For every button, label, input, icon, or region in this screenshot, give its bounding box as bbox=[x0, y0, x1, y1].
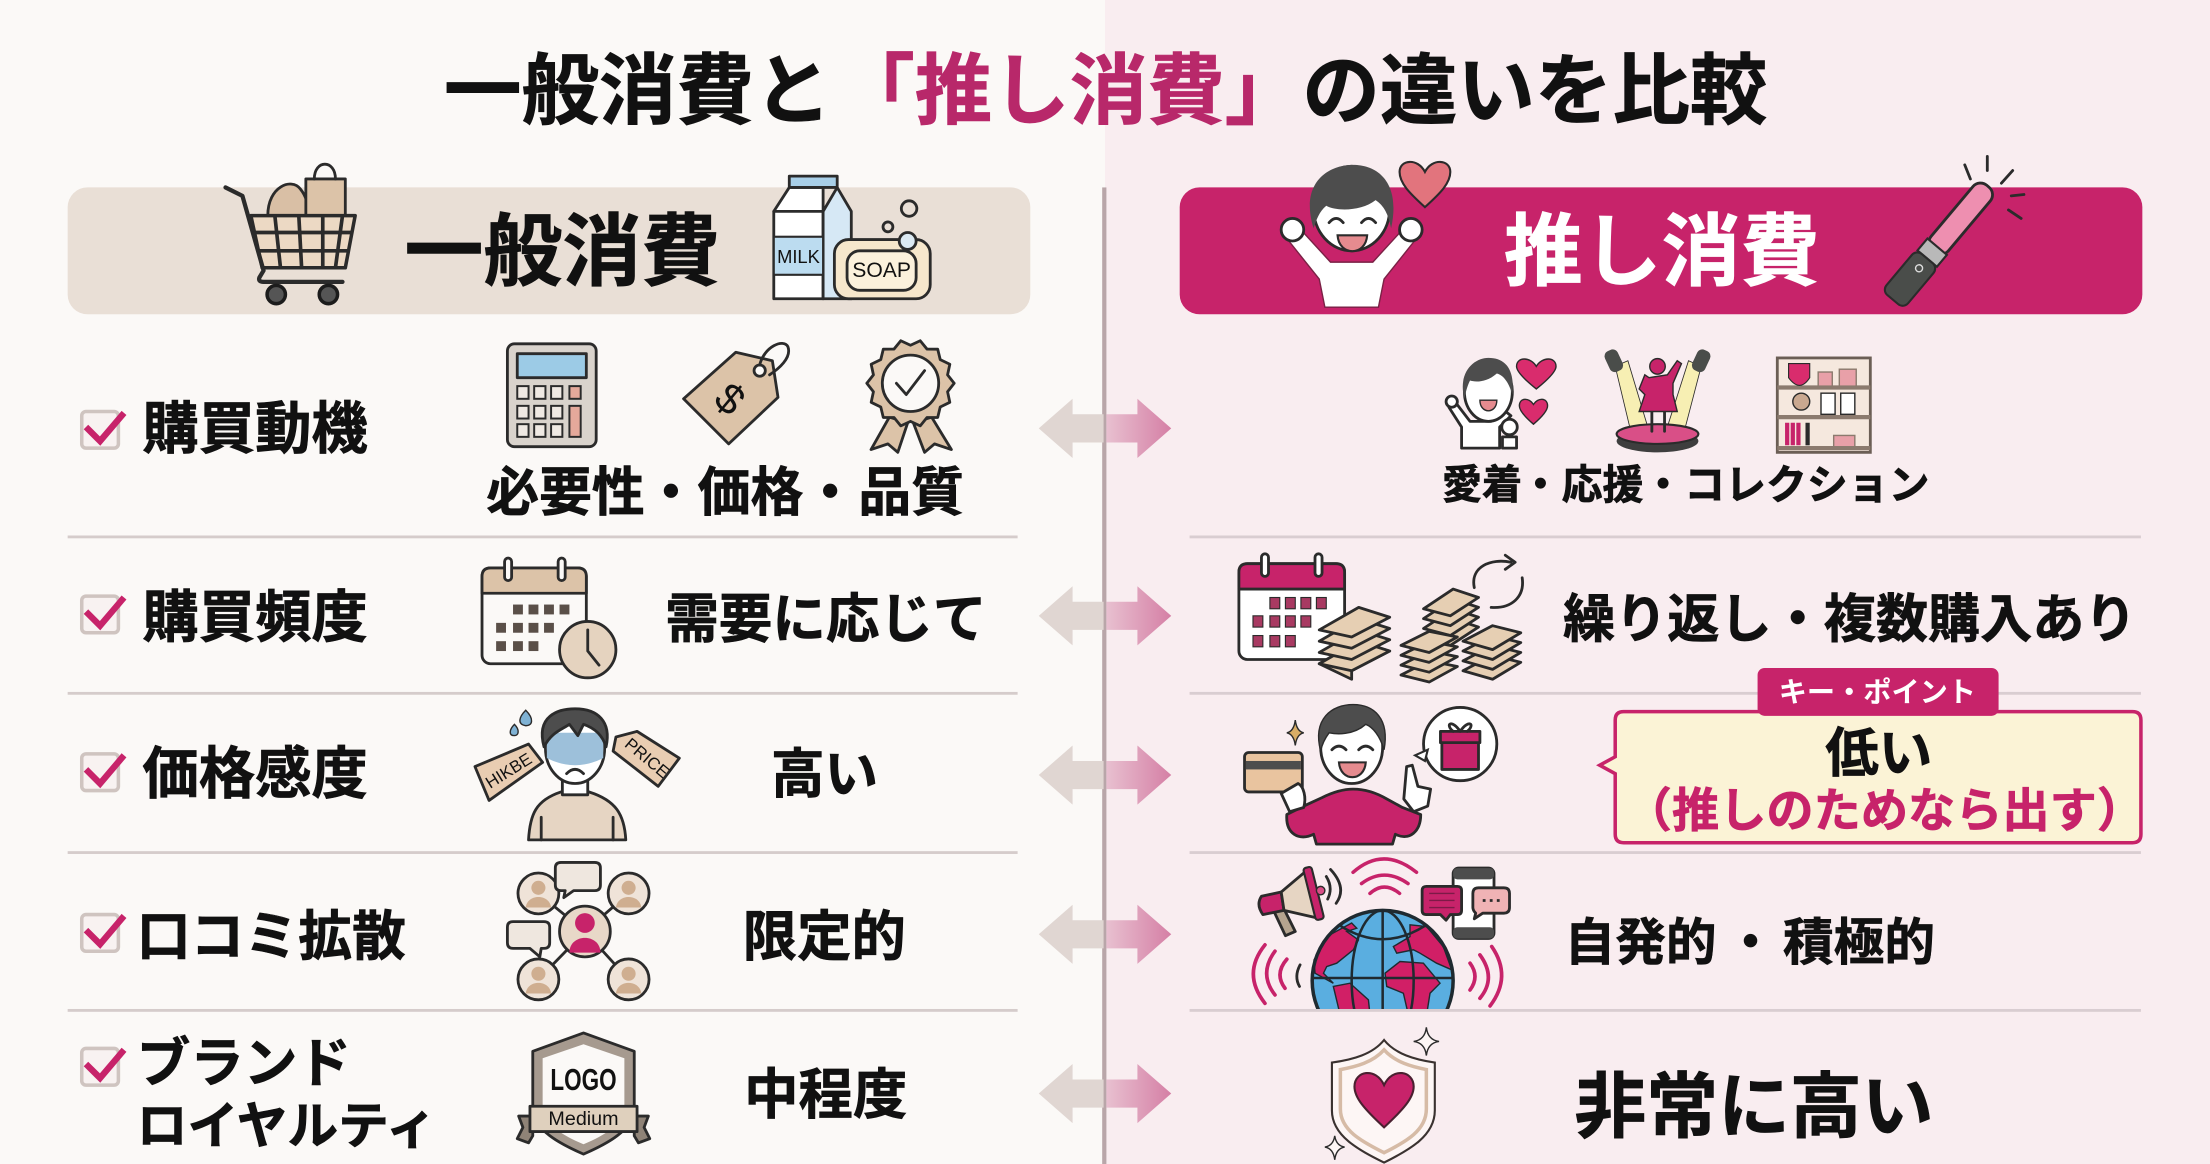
value: ・ bbox=[804, 464, 857, 523]
row: purchase frequency (oshi) bbox=[1239, 554, 2136, 682]
value: 非常に高い bbox=[1574, 1068, 1934, 1148]
value: 愛着 bbox=[1442, 462, 1522, 507]
icon: logo shield: Medium bbox=[548, 1108, 619, 1130]
icon: price tag: $ bbox=[706, 373, 754, 424]
value: コレクション bbox=[1684, 462, 1929, 508]
value: 品質 bbox=[858, 464, 964, 523]
arrow pair: word of mouth bbox=[1039, 905, 1171, 964]
checkbox bbox=[82, 754, 124, 791]
label: ロイヤルティ bbox=[137, 1097, 436, 1154]
icon: idol on stage bbox=[1603, 348, 1712, 452]
row: purchase motive (oshi) bbox=[1442, 348, 1929, 508]
label: 購買頻度 bbox=[142, 586, 368, 649]
arrow pair: motive bbox=[1039, 399, 1171, 458]
background: right half bbox=[1105, 0, 2210, 1164]
icon: worried person with price tags: HIKBE bbox=[482, 749, 535, 792]
value: 中程度 bbox=[744, 1064, 907, 1125]
row: brand loyalty (oshi) bbox=[1325, 1027, 1934, 1163]
callout: 低い bbox=[1825, 724, 1932, 783]
value: 繰り返し・複数購入あり bbox=[1563, 591, 2136, 649]
header: oshi consumption: 推し消費 bbox=[1504, 208, 1820, 296]
icon: price tag bbox=[684, 343, 789, 444]
icon: worried person with price tags bbox=[475, 709, 679, 840]
megaphone bbox=[1259, 866, 1341, 936]
title: 一般消費と bbox=[444, 49, 832, 135]
key point tag: キー・ポイント bbox=[1779, 676, 1976, 708]
header: general consumption: 一般消費 bbox=[405, 208, 720, 296]
value: 価格 bbox=[698, 464, 804, 523]
value: ・ bbox=[1520, 462, 1561, 507]
value: ・ bbox=[1643, 462, 1683, 507]
label bbox=[137, 1034, 436, 1154]
icon: penlight bbox=[1882, 156, 2024, 309]
label: 購買動機 bbox=[142, 397, 368, 460]
key point tag bbox=[1758, 668, 1999, 716]
row: purchase motive bbox=[82, 341, 964, 523]
center divider bbox=[1102, 187, 1106, 1164]
value bbox=[486, 464, 964, 523]
value: 限定的 bbox=[743, 907, 906, 968]
value bbox=[1442, 462, 1929, 508]
row: price sensitivity bbox=[82, 709, 878, 840]
arrow pair: loyalty bbox=[1039, 1064, 1171, 1123]
value: 需要に応じて bbox=[665, 591, 987, 650]
panel: general consumption bbox=[68, 164, 1030, 1154]
callout: （推しのためなら出す） bbox=[1625, 785, 2144, 838]
header: oshi consumption bbox=[1180, 156, 2142, 314]
icon: milk carton and soap: MILK bbox=[777, 246, 821, 267]
comparison arrows bbox=[1039, 399, 1171, 1123]
label: ブランド bbox=[137, 1034, 351, 1093]
icon: shopping cart bbox=[226, 164, 355, 304]
value: 自発的 bbox=[1564, 914, 1717, 971]
value: ・ bbox=[1726, 915, 1776, 971]
label: 価格感度 bbox=[142, 742, 368, 805]
checkbox bbox=[82, 915, 124, 951]
icon: fan with hearts bbox=[1446, 358, 1556, 448]
title: の違いを比較 bbox=[1302, 49, 1767, 135]
icon: logo shield bbox=[517, 1033, 650, 1154]
row: brand loyalty bbox=[82, 1033, 907, 1154]
row: word of mouth (oshi) bbox=[1251, 857, 1933, 1009]
title bbox=[444, 49, 1767, 135]
icon: cheering person with heart bbox=[1281, 162, 1450, 307]
header: general consumption bbox=[68, 164, 1030, 314]
label: 口コミ拡散 bbox=[137, 907, 406, 967]
row: word of mouth bbox=[82, 862, 906, 1000]
checkbox bbox=[82, 411, 124, 448]
checkbox bbox=[82, 1048, 124, 1085]
icon: milk carton and soap bbox=[774, 176, 930, 299]
value: 必要性 bbox=[486, 464, 645, 523]
icon: milk carton and soap: SOAP bbox=[852, 259, 911, 282]
icon: collection shelf bbox=[1777, 358, 1870, 452]
icon: calendar with stacks bbox=[1239, 554, 1523, 682]
icon: megaphone, globe, phone bbox=[1251, 857, 1511, 1009]
checkbox bbox=[82, 596, 124, 633]
row: purchase frequency bbox=[82, 558, 987, 678]
callout bbox=[1600, 712, 2144, 843]
icon: happy spender bbox=[1245, 705, 1497, 844]
arrow pair: frequency bbox=[1039, 586, 1171, 645]
arrow pair: price bbox=[1039, 745, 1171, 805]
title: 「推し消費」 bbox=[837, 49, 1302, 135]
value: 高い bbox=[771, 746, 878, 805]
icon: calculator bbox=[507, 344, 596, 447]
value: 応援 bbox=[1562, 462, 1644, 508]
value bbox=[1564, 914, 1935, 971]
icon: worried person with price tags: PRICE bbox=[621, 734, 673, 782]
value: ・ bbox=[644, 464, 697, 523]
row: price sensitivity (oshi) bbox=[1245, 668, 2144, 844]
icon: logo shield: LOGO bbox=[550, 1062, 617, 1097]
background: left half bbox=[0, 0, 1105, 1164]
icon: network of people bbox=[507, 862, 649, 1000]
value: 積極的 bbox=[1783, 914, 1935, 971]
icon: heart shield bbox=[1325, 1027, 1439, 1163]
icon: quality rosette bbox=[867, 341, 954, 452]
panel: oshi consumption bbox=[1180, 156, 2144, 1163]
icon: calendar and clock bbox=[482, 558, 616, 678]
